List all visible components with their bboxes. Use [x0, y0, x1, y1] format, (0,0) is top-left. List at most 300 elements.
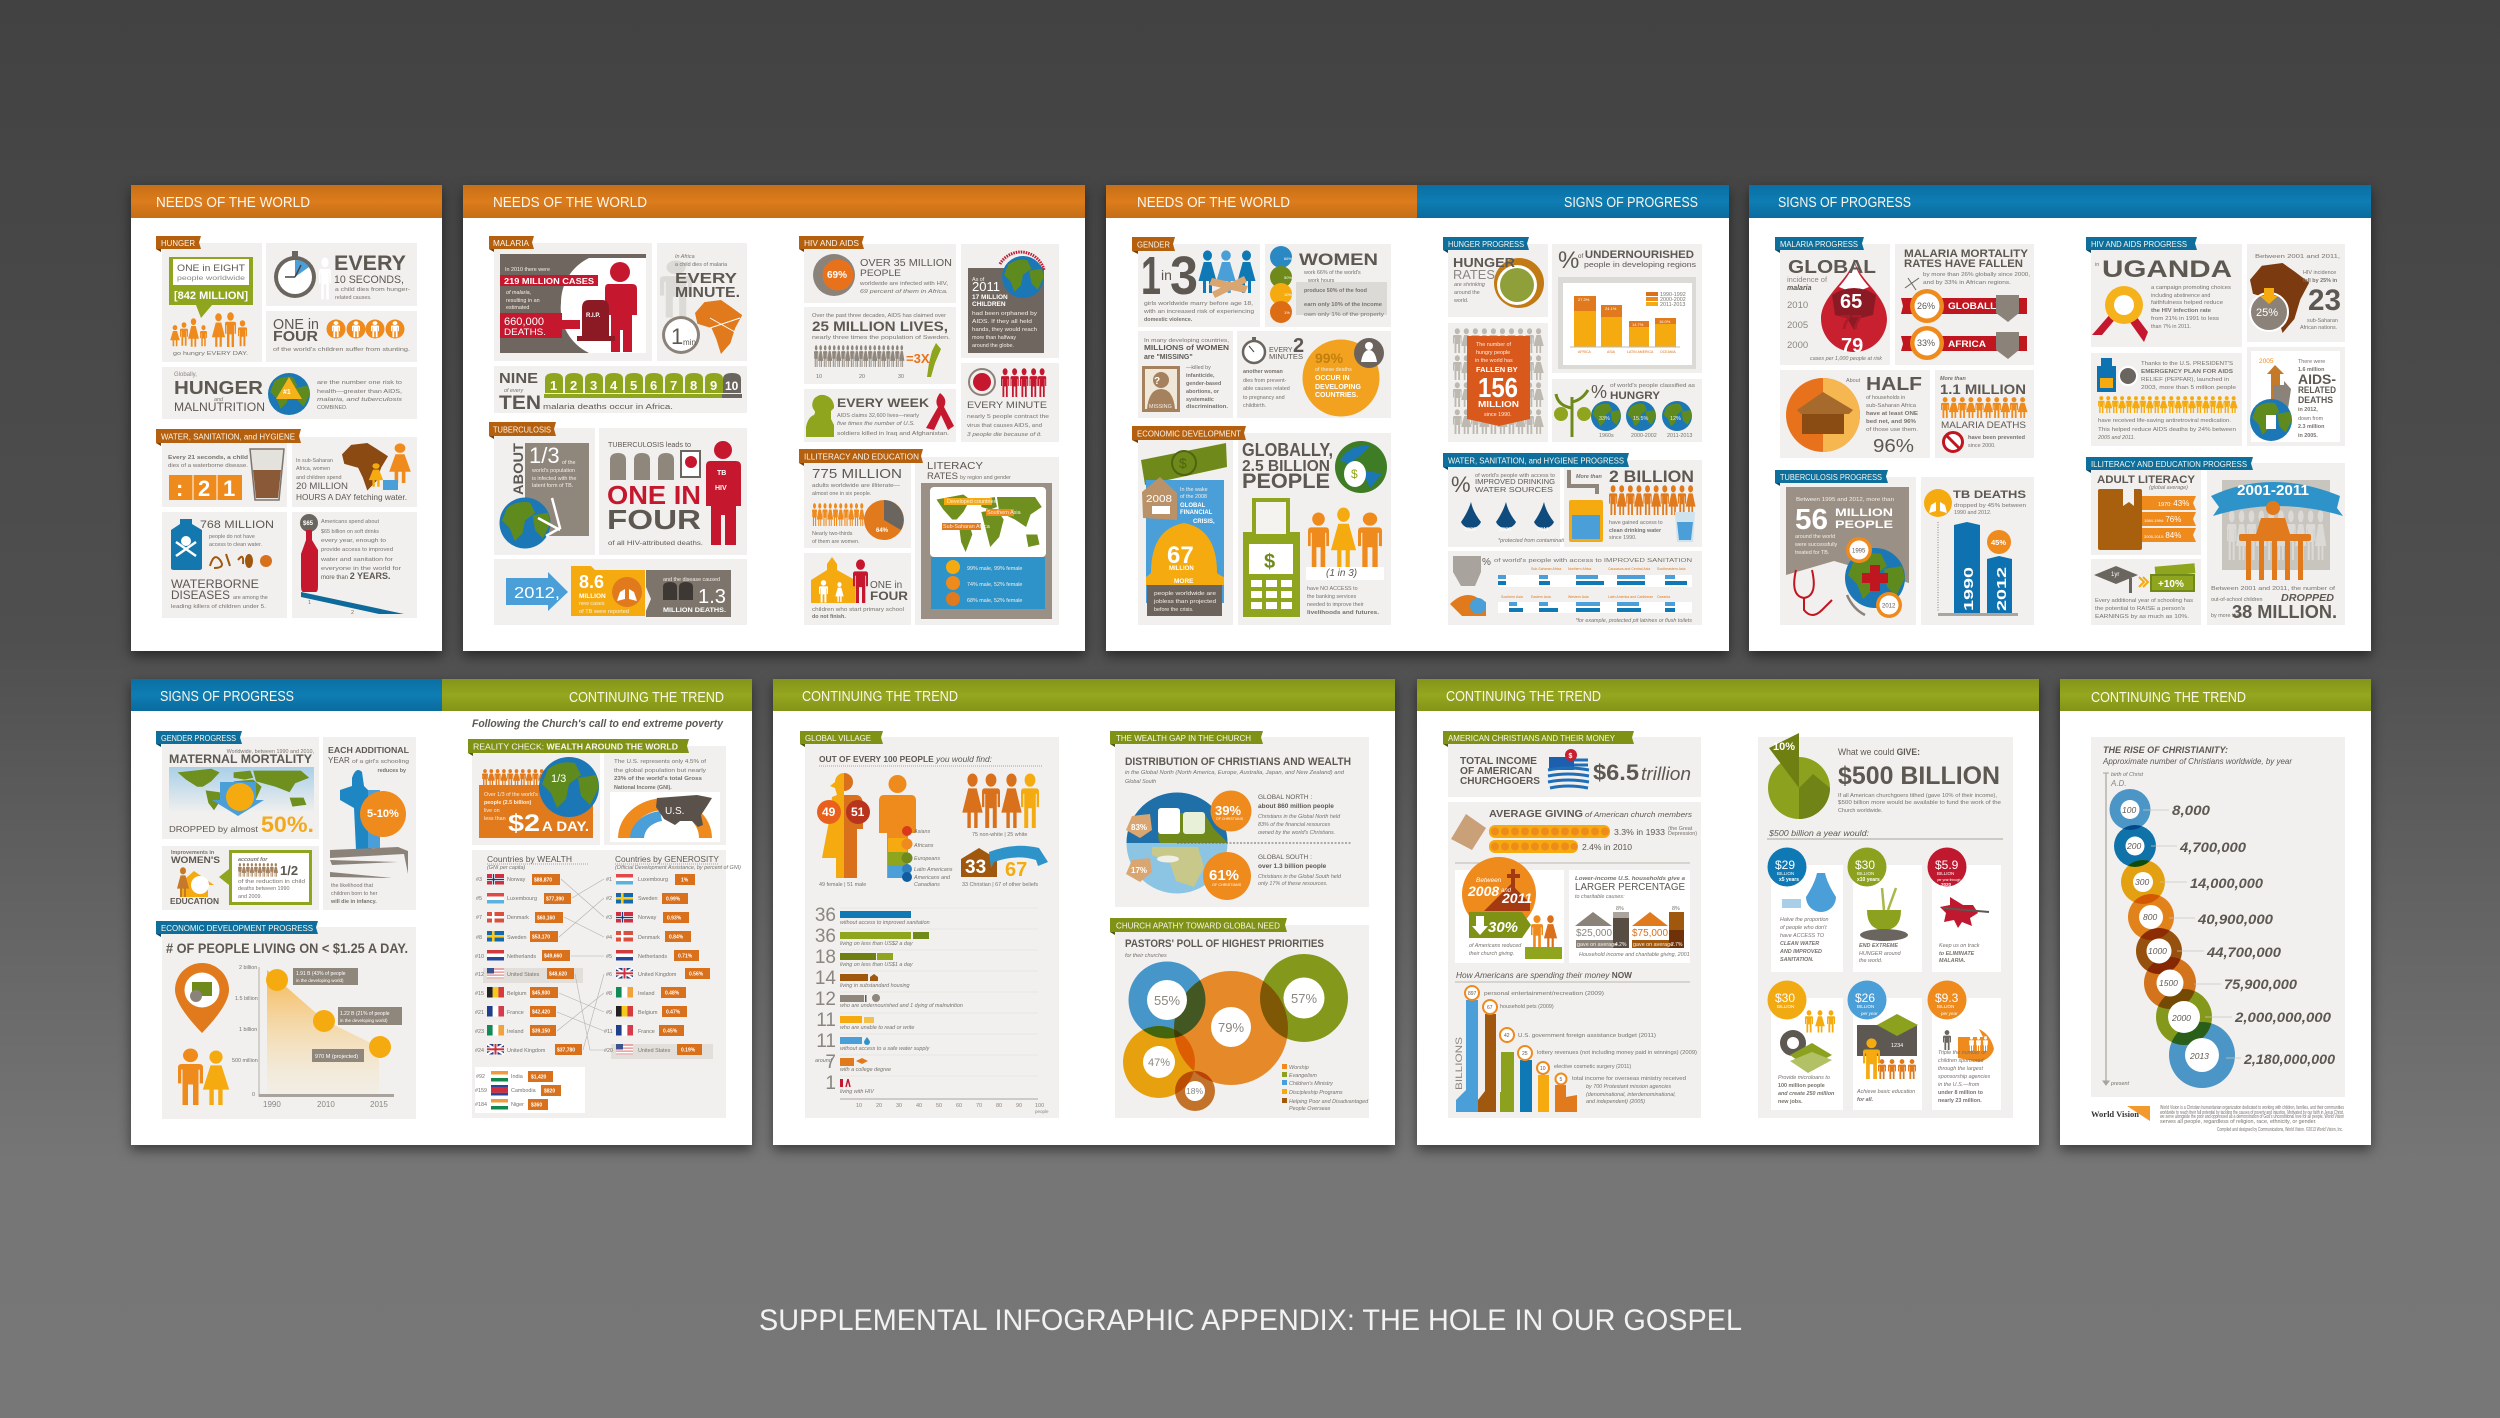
poorest countries rows: Cambodia [511, 1088, 536, 1094]
panel: larger percentage: to charitable causes: [1575, 894, 1625, 900]
panel: Uganda campaign: a campaign promoting choices [2151, 285, 2231, 291]
section tab: American Christians [1443, 731, 1634, 747]
panel: one in four HIV-attributed deaths [599, 428, 747, 555]
panel: literacy rates map: 68% male, 52% female [967, 598, 1022, 604]
tile: clean water: BILLION [1777, 871, 1794, 876]
bar chart: out of 100 people: 80 [996, 1103, 1002, 1109]
tile: eliminate malaria: 2020 [1941, 882, 1952, 887]
panel: one in eight: [842 MILLION] [174, 290, 248, 302]
panel: HIV incidence in Africa: sub-Saharan [2307, 318, 2338, 324]
panel: 30% reduced giving: and [1501, 888, 1512, 894]
panel: 775 million illiterate: 775 MILLION [812, 466, 902, 481]
panel: 67 million jobless: CRISIS, [1193, 519, 1215, 525]
panel: hungry percentage globes: 2000-2002 [1631, 433, 1657, 439]
panel: 2 billion gained water: clean drinking water [1609, 528, 1662, 534]
panel: distribution of Christians and wealth: 17% [1131, 866, 1147, 875]
panel: 2 billion gained water: since 1990. [1609, 535, 1637, 541]
bar chart: out of 100 people: 50 [936, 1103, 942, 1109]
panel: nine of every ten: 10 [725, 379, 739, 393]
panel: malaria mortality: MALARIA MORTALITY [1904, 248, 2029, 260]
wealth list rows: #12 [475, 972, 484, 978]
wealth list rows: Ireland [507, 1029, 523, 1035]
coins row 2010: 2.4% in 2010 [1582, 842, 1632, 852]
panel: TB deaths chart: 1990 [1961, 567, 1976, 611]
panel: undernourished bar chart: OCEANIA [1660, 350, 1676, 354]
generosity list rows: #5 [606, 954, 612, 960]
panel: US share of wealth: 23% of the world's total Gross [614, 776, 702, 782]
panel: schooling raises earnings: the potential to RAISE a person's [2095, 606, 2185, 612]
panel: Uganda campaign: UGANDA [2102, 256, 2232, 283]
panel: larger percentage: gave on average [1633, 942, 1673, 948]
panel: improved sanitation: Oceania [1657, 595, 1670, 599]
page header: SIGNS OF PROGRESS [1778, 194, 1911, 211]
panel: 1 in 3 girls: 3 [1170, 246, 1198, 306]
figure: religion: 33 Christian | 67 of other beliefs [962, 882, 1038, 888]
Christian population figures: 14,000,000 [2190, 875, 2263, 891]
panel: undernourished bar chart: 2011-2013 [1660, 302, 1685, 308]
figure: religion: 67 [1005, 859, 1027, 881]
panel: Uganda campaign: than 7% in 2011. [2151, 324, 2191, 330]
panel: nine of every ten: NINE [499, 370, 538, 387]
panel: 1 in 3 girls: 1 [1141, 246, 1161, 306]
wealth list rows: $42,420 [532, 1010, 550, 1016]
section tab: malaria: MALARIA [493, 238, 529, 248]
panel: every 2 minutes: EVERY [1269, 347, 1293, 354]
panel: AIDS-related deaths: There were [2298, 359, 2325, 365]
tile: sponsorship: per year [1940, 1011, 1958, 1016]
panel: malaria cases [494, 243, 652, 361]
tile: clean water [1768, 848, 1843, 972]
spending chart: (denominational, interdenominational, [1586, 1092, 1676, 1098]
panel: fallen by 156 million: in the world has [1475, 358, 1513, 364]
panel: 67 million jobless: MORE [1174, 578, 1194, 585]
wealth list rows: $49,660 [544, 954, 562, 960]
panel: 30% reduced giving: 30% [1488, 919, 1518, 936]
wealth list rows: United States [507, 972, 540, 978]
panel: adult literacy: ADULT LITERACY [2097, 474, 2196, 486]
spending chart: 67 [1487, 1005, 1493, 1011]
panel: larger percentage: $75,000 [1632, 928, 1668, 939]
panel: 25 million lives: 20 [859, 374, 865, 380]
panel: undernourished bar chart: % [1558, 247, 1579, 274]
panel: 768 million, waterborne diseases: DISEASES [171, 588, 230, 602]
spending chart: elective cosmetic surgery (2011) [1554, 1064, 1631, 1070]
section tab: illiteracy: ILLITERACY AND EDUCATION [804, 452, 919, 462]
panel: people living on under $1.25 chart: in the developing world) [296, 978, 344, 983]
panel: 2012 TB statistics: and the disease caused [663, 577, 720, 583]
panel: 2.5 billion people: PEOPLE [1242, 470, 1330, 493]
panel: missing women: —killed by [1186, 365, 1211, 371]
panel: about one third TB [494, 428, 595, 555]
section tab: illiteracy progress: ILLITERACY AND EDUCATION PROGRESS [2091, 459, 2247, 469]
panel: improved drinking water: 1990 [1464, 527, 1476, 533]
panel: countries by wealth and generosity [472, 850, 741, 1118]
wealth list rows: $37,780 [557, 1048, 575, 1054]
panel: every week: EVERY WEEK [837, 396, 929, 410]
panel: rise of Christianity: Approximate number of Christians worldwide, by year [2102, 757, 2292, 766]
panel: hunger tab: HUNGER [161, 238, 195, 248]
poorest countries rows: Niger [511, 1102, 524, 1108]
panel: one in four HIV-attributed deaths: TB [717, 470, 726, 477]
panel: improved drinking water: 2000 [1499, 527, 1511, 533]
panel: Uganda campaign [2091, 244, 2242, 347]
tile: end hunger: BILLION [1857, 871, 1874, 876]
generosity list rows: Netherlands [638, 954, 667, 960]
generosity list rows: Luxembourg [638, 877, 668, 883]
wealth list rows: #8 [476, 935, 482, 941]
panel: 25 million lives [804, 307, 956, 384]
page header: two colour: SIGNS OF PROGRESS [1564, 194, 1698, 211]
page header: two colour: NEEDS OF THE WORLD [1137, 194, 1290, 211]
section tab: reality check [468, 739, 689, 756]
page header [773, 679, 1395, 711]
table heading: generosity [615, 855, 741, 871]
tile: clean water: $29 [1775, 858, 1795, 872]
bar chart: out of 100 people: 90 [1016, 1103, 1022, 1109]
panel: 56 million treated: around the world [1795, 534, 1835, 540]
panel: out-of-school children dropped: Between 2001 and 2011, the number of [2211, 586, 2336, 592]
panel: 2.5 billion people: 2.5 BILLION [1242, 458, 1330, 475]
panel: hunger and malnutrition: Globally, [174, 372, 197, 378]
panel: soft drinks spending: water and sanitation for [320, 557, 393, 563]
bar chart: out of 100 people: 14 [815, 968, 836, 989]
panel: 2.5 billion people: (1 in 3) [1326, 568, 1357, 579]
panel: fallen by 156 million: MILLION [1478, 400, 1519, 409]
panel: improved sanitation [1448, 551, 1702, 625]
panel: total income: OF AMERICAN [1460, 766, 1532, 777]
panel: hunger rates: around the [1454, 290, 1480, 296]
panel: 25 million lives: 30 [898, 374, 904, 380]
panel: hungry percentage globes: 15.5% [1633, 416, 1648, 422]
panel: hungry percentage globes [1552, 379, 1702, 442]
panel: over 35 million people [804, 244, 956, 303]
panel: 17 million orphans: had been orphaned by [972, 311, 1037, 317]
panel: malaria cases: of malaria, [506, 290, 531, 296]
panel: rise of Christianity: present [2110, 1081, 2129, 1087]
spending chart: personal entertainment/recreation (2009) [1484, 991, 1604, 997]
panel: 1.1 million malaria deaths: since 2000. [1968, 443, 1996, 449]
panel: Uganda campaign: including abstinence and [2151, 293, 2210, 299]
section tab: economic progress: ECONOMIC DEVELOPMENT PROGRESS [161, 923, 313, 933]
figure: continents person: Asians [913, 829, 930, 835]
panel: what we could give: What we could GIVE: [1838, 747, 1920, 758]
panel: literacy rates map: by region and gender [960, 475, 1011, 481]
panel: improved sanitation: Caucasus and Central Asia [1608, 567, 1650, 571]
generosity list rows: Sweden [638, 896, 657, 902]
tile: eliminate malaria: $5.9 [1935, 858, 1959, 872]
tile: end hunger: END EXTREME [1859, 943, 1898, 949]
panel: every 2 minutes: 99% [1315, 350, 1344, 366]
panel: HIV incidence in Africa: 25% [2256, 307, 2278, 319]
section tab: tuberculosis: TUBERCULOSIS [493, 424, 551, 434]
bar chart: out of 100 people: 12 [815, 989, 836, 1010]
panel: undernourished bar chart [1552, 244, 1702, 373]
panel: 2012 TB statistics: new cases [579, 601, 605, 607]
generosity list rows: United States [638, 1048, 671, 1054]
panel: literacy rates map [915, 457, 1059, 625]
panel: rise of Christianity: THE RISE OF CHRISTIANITY: [2103, 745, 2228, 755]
Christian population figures: 2,180,000,000 [2243, 1051, 2335, 1067]
panel: missing women: MISSING [1149, 404, 1172, 410]
panel: distribution of Christians and wealth: Christians in the Global South held [1258, 874, 1342, 880]
bar chart: out of 100 people: people [1035, 1109, 1049, 1114]
panel: distribution of Christians and wealth [1115, 737, 1369, 907]
panel: 2012 TB statistics [494, 559, 747, 625]
panel: distribution of Christians and wealth: GLOBAL SOUTH : [1258, 854, 1312, 861]
panel: nine of every ten: 1 [550, 378, 557, 393]
timeline circles: 200 [2126, 841, 2141, 851]
panel: distribution of Christians and wealth: 39% [1215, 803, 1241, 818]
panel: 67 million jobless: jobless than projected [1153, 599, 1216, 605]
tile: sponsorship: under 8 million to [1938, 1090, 1984, 1096]
poorest countries rows: #184 [475, 1102, 487, 1108]
wealth list rows: $77,390 [546, 896, 564, 902]
tile: end hunger: HUNGER around [1859, 951, 1902, 957]
caption: SUPPLEMENTAL INFOGRAPHIC APPENDIX: THE HOLE IN OUR GOSPEL [759, 1304, 1742, 1337]
panel: malaria mortality: GLOBALLY [1948, 301, 2002, 311]
panel: half of households: of those use them. [1866, 427, 1918, 433]
panel: hours fetching water: 20 MILLION [296, 481, 348, 492]
generosity list rows: #1 [606, 877, 612, 883]
panel: women statistics: own only 1% of the property [1304, 312, 1384, 318]
generosity list rows [604, 874, 710, 1055]
panel: every minute HIV: 3 people die because of it. [967, 432, 1042, 438]
panel: hours fetching water: In sub-Saharan [296, 458, 333, 464]
panel: soft drinks spending: Americans spend about [321, 519, 380, 525]
organisation description: we serve alongside the poor and oppressed as a demonstration of God's unconditional love for all people. World Vision [2159, 1114, 2344, 1120]
section tab: HIV and AIDS [799, 236, 864, 252]
panel: one in four HIV-attributed deaths: HIV [715, 485, 727, 492]
wealth list rows: #3 [476, 877, 482, 883]
tile: sponsorship: $9.3 [1935, 991, 1959, 1005]
panel: pastors' poll venn chart: Children's Ministry [1289, 1081, 1333, 1087]
panel: AIDS-related deaths: AIDS- [2298, 371, 2336, 387]
spending chart [1454, 986, 1697, 1112]
panel: literacy rates map: RATES [927, 471, 958, 482]
section tab: gender progress: GENDER PROGRESS [161, 733, 236, 743]
panel: 775 million illiterate: 64% [876, 528, 889, 534]
coins row 1933 [1489, 825, 1697, 838]
panel: one in four dropouts: do not finish. [812, 614, 846, 620]
wealth list rows: Luxembourg [507, 896, 537, 902]
panel: US share of wealth [604, 746, 726, 845]
panel: distribution of Christians and wealth: about 860 million people [1258, 803, 1334, 810]
panel: over 35 million people: PEOPLE [860, 268, 901, 279]
poorest countries rows: $360 [531, 1102, 542, 1108]
panel: malaria cases: 219 MILLION CASES [504, 277, 595, 286]
panel: hungry percentage globes: 12% [1670, 416, 1681, 422]
panel: improved drinking water: WATER SOURCES [1475, 487, 1553, 494]
panel: every minute [657, 243, 747, 361]
panel: 30% reduced giving: of Americans reduced [1469, 943, 1522, 949]
panel: improved sanitation: *for example, protected pit latrines or flush toilets [1575, 618, 1692, 624]
panel: hours fetching water [292, 437, 417, 507]
tile: eliminate malaria: Keep us on track [1939, 943, 1980, 949]
panel: 775 million illiterate [804, 459, 911, 548]
panel: waterborne timer: : [176, 476, 183, 501]
panel: $2 a day [472, 746, 600, 845]
panel: 30% reduced giving: Between [1476, 877, 1502, 884]
panel: fallen by 156 million: 156 [1478, 372, 1518, 403]
table heading: wealth: (GNI per capita) [487, 865, 526, 871]
panel: global malaria drop: incidence of [1787, 275, 1828, 284]
panel: every 2 minutes: MINUTES [1269, 354, 1303, 361]
section tab: malaria [489, 236, 534, 252]
panel: what we could give: 10% [1773, 741, 1795, 753]
tile: clean water: AND IMPROVED [1779, 949, 1822, 955]
panel: improved drinking water: IMPROVED DRINKING [1475, 479, 1555, 486]
panel: nine of every ten: 6 [650, 378, 657, 393]
panel: every 2 minutes: childbirth. [1243, 403, 1266, 409]
wealth list rows: $60,160 [537, 916, 555, 922]
spending chart: 10 [1540, 1066, 1546, 1072]
figure: female and male [817, 773, 870, 888]
panel: global malaria drop: cases per 1,000 people at risk [1810, 356, 1882, 362]
panel: hunger rates: HUNGER [1453, 255, 1516, 270]
panel: larger percentage: Household income and charitable giving, 2001 [1579, 952, 1690, 958]
page header: two colour [131, 679, 752, 711]
panel: soft drinks spending: everyone in the world for [321, 566, 401, 572]
panel: 775 million illiterate: Nearly two-thirds [812, 531, 853, 537]
panel: malaria cases: estimated [506, 305, 529, 311]
panel: every week: AIDS claims 32,600 lives—nearly [837, 413, 919, 419]
panel: improved drinking water [1448, 460, 1570, 547]
logo: World Vision: World Vision [2091, 1109, 2139, 1119]
section tab: malaria progress [1775, 237, 1864, 253]
panel: undernourished bar chart: 16.0% [1659, 319, 1671, 324]
panel: one in four HIV-attributed deaths: ONE IN [607, 480, 701, 510]
panel: hunger rates: world. [1453, 298, 1468, 304]
panel: improved drinking water: of world's people with access to [1475, 473, 1555, 479]
bar chart: out of 100 people: 40 [916, 1103, 922, 1109]
panel: 1.1 million malaria deaths: have been prevented [1968, 435, 2025, 441]
panel: hungry percentage globes: 1960s [1599, 433, 1614, 439]
panel: AIDS-related deaths: RELATED [2298, 385, 2336, 396]
panel: 2.5 billion people: $ [1264, 551, 1275, 573]
bar chart: out of 100 people: living with HIV [840, 1089, 875, 1095]
tile: sponsorship: in the U.S.—from [1938, 1082, 1980, 1088]
panel: waterborne timer [162, 437, 287, 507]
panel: rise of Christianity: A.D. [2110, 779, 2127, 788]
panel: global malaria drop: 2000 [1787, 340, 1808, 351]
panel: one in eight: ONE in EIGHT [177, 263, 246, 273]
panel: PEPFAR: EMERGENCY PLAN FOR AIDS [2141, 369, 2233, 375]
panel: average giving and spending [1448, 802, 1701, 1118]
panel: 17 million orphans: AIDS. If they all held [972, 319, 1032, 325]
panel: undernourished bar chart: 1990-1992 [1660, 292, 1686, 298]
wealth list rows: $88,870 [534, 878, 552, 884]
panel: every 2 minutes: OCCUR IN [1315, 375, 1350, 382]
tile: eliminate malaria: MALARIA. [1939, 958, 1966, 964]
tile: sponsorship: through the largest [1938, 1066, 1983, 1072]
panel: improved sanitation: Southern Asia [1501, 595, 1523, 599]
panel: 67 million jobless: 67 [1167, 542, 1194, 569]
panel: missing women: are "MISSING" [1144, 354, 1193, 361]
bar chart: out of 100 people: living in substandard housing [840, 983, 910, 989]
tile: microloans: new jobs. [1778, 1099, 1803, 1105]
panel: 67 million jobless: before the crisis. [1154, 607, 1194, 613]
timeline circles: 100 [2122, 805, 2136, 815]
section tab: HIV progress [2086, 237, 2197, 253]
panel: hunger and malnutrition: are the number one risk to [317, 380, 402, 386]
panel: 2.5 billion people: livelihoods and futures. [1307, 610, 1380, 616]
wealth list rows: Belgium [507, 991, 527, 997]
panel: total income [1448, 737, 1701, 797]
panel: one in four HIV-attributed deaths: of all HIV-attributed deaths. [608, 540, 703, 547]
page header [463, 185, 1085, 218]
panel: hours fetching water: HOURS A DAY fetching water. [296, 492, 407, 502]
panel: 1 in 3 girls: domestic violence. [1144, 317, 1193, 323]
wealth list rows: #21 [475, 1010, 484, 1016]
panel: every 2 minutes: able causes related [1243, 386, 1290, 392]
section tab: water progress: WATER, SANITATION, and HYGIENE PROGRESS [1448, 456, 1624, 466]
panel: one in eight [162, 243, 262, 362]
panel: $2 a day: people (2.5 billion) [484, 800, 532, 806]
panel: 67 million jobless: 2008 [1146, 494, 1173, 505]
section tab: economic progress [156, 921, 318, 937]
panel: Uganda campaign: the HIV infection rate [2151, 308, 2211, 314]
panel: additional year of schooling: the likelihood that [331, 883, 373, 889]
panel: 30% reduced giving [1455, 857, 1564, 963]
generosity list rows: #4 [606, 935, 612, 941]
panel: larger percentage: LARGER PERCENTAGE [1575, 882, 1685, 893]
poorest countries rows: India [511, 1074, 523, 1080]
page 4: signs of progress [1749, 185, 2371, 651]
wealth list rows: $53,170 [532, 934, 550, 940]
page 1: needs of the world (hunger and water) [131, 185, 442, 651]
figure: continents person: Americans and [913, 875, 951, 881]
panel: half of households: HALF [1866, 374, 1922, 394]
panel: schooling raises earnings: EARNINGS by as much as 10%. [2095, 614, 2189, 620]
wealth list rows: #24 [475, 1048, 484, 1054]
generosity list rows: #20 [604, 1048, 613, 1054]
poorest countries rows: #159 [475, 1088, 487, 1094]
panel: AIDS-related deaths: down from [2298, 416, 2324, 422]
bar chart: out of 100 people: 11 [816, 1010, 836, 1031]
panel: 768 million, waterborne diseases: are among the [233, 595, 268, 601]
panel: larger percentage: Lower-income U.S. households give a [1575, 876, 1685, 882]
generosity list rows: 1% [681, 878, 689, 884]
panel: people living on under $1.25 chart: # OF PEOPLE LIVING ON < $1.25 A DAY. [166, 940, 408, 956]
panel: hunger and malnutrition: MALNUTRITION [174, 400, 265, 414]
panel: one in four stunting [266, 311, 417, 362]
wealth list rows: #5 [476, 896, 482, 902]
section tab: HIV progress: HIV AND AIDS PROGRESS [2091, 239, 2187, 249]
panel: Uganda campaign: from 21% in 1991 to less [2151, 316, 2219, 322]
tile: microloans: and create 250 million [1778, 1091, 1835, 1097]
wealth list rows: #23 [475, 1029, 484, 1035]
panel: maternal mortality: DROPPED by almost [169, 824, 259, 834]
panel: 56 million treated: 1995 [1852, 548, 1866, 554]
panel: distribution of Christians and wealth: Global South [1125, 779, 1156, 785]
section tab: hunger progress: HUNGER PROGRESS [1448, 239, 1524, 249]
panel: women's education: and 2009. [238, 894, 262, 900]
panel: what we could give: $500 billion more would be available to fund the work of the [1838, 800, 2001, 806]
panel: 2 billion gained water: 2 BILLION [1609, 467, 1694, 486]
panel: nine of every ten: 2 [570, 378, 577, 393]
panel: maternal mortality: MATERNAL MORTALITY [169, 752, 312, 766]
panel: undernourished bar chart: 24.1% [1605, 306, 1617, 311]
panel: 1 in 3 girls: in [1161, 267, 1172, 283]
panel: rise of Christianity: birth of Christ [2111, 772, 2144, 778]
generosity list rows: 0.48% [665, 990, 680, 996]
panel: people living on under $1.25 chart: 1.91 B (43% of people [296, 971, 346, 977]
generosity list rows: #6 [606, 972, 612, 978]
page header: two colour [1106, 185, 1729, 218]
panel: soft drinks spending: provide access to improved [321, 547, 393, 553]
panel: every minute HIV: virus that causes AIDS, and [967, 423, 1042, 429]
figure: race people [962, 773, 1039, 838]
